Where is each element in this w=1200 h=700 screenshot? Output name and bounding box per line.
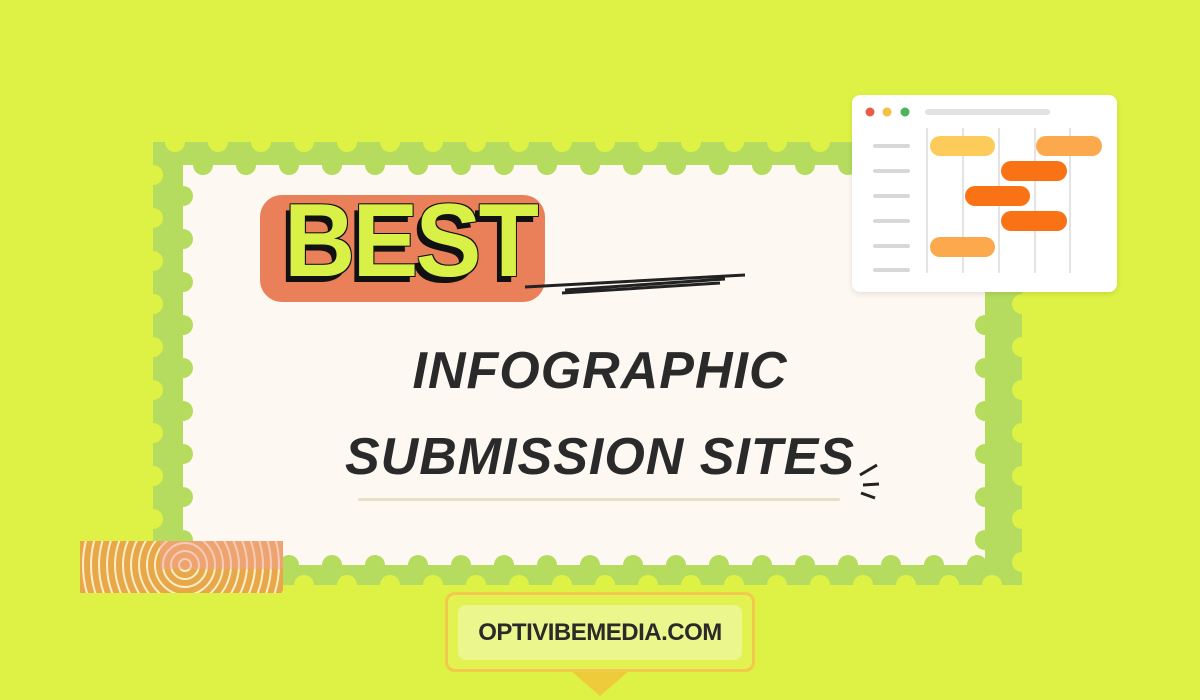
website button: OPTIVIBEMEDIA.COM: [478, 619, 722, 646]
BEST badge: BEST: [284, 183, 536, 299]
underline: [358, 498, 840, 501]
gantt window: [852, 95, 1117, 292]
washi tape: [80, 541, 283, 593]
scribble arrow: [524, 274, 746, 294]
title text: SUBMISSION SITES: [345, 428, 855, 486]
sparkle: [859, 464, 880, 500]
title text: [345, 342, 855, 486]
website button: [445, 592, 755, 696]
title text: INFOGRAPHIC: [412, 342, 788, 400]
